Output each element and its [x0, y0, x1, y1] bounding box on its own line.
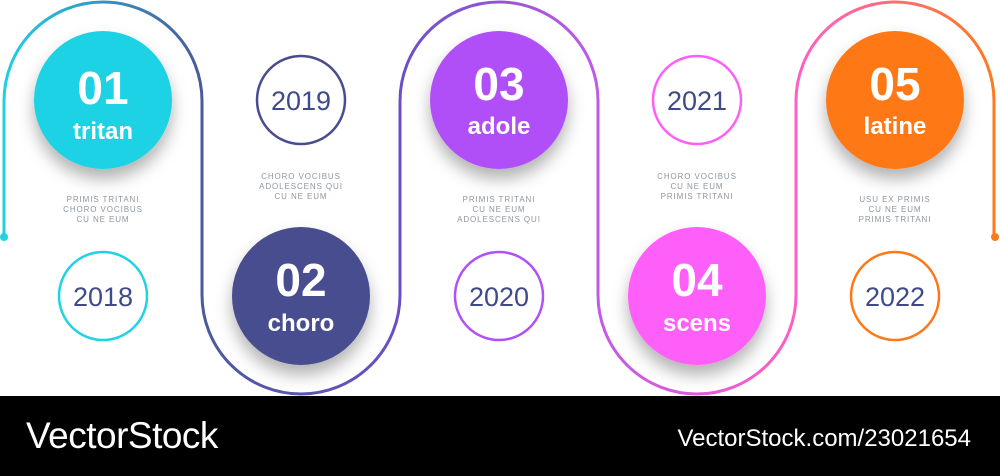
step 02 — [232, 227, 370, 365]
text 02: CHORO VOCIBUS — [261, 172, 341, 181]
step 04 label: 04 — [671, 254, 723, 306]
step 05 label: 05 — [869, 58, 921, 110]
text 04: CU NE EUM — [670, 182, 724, 191]
end dot — [991, 233, 999, 241]
year 2018: 2018 — [73, 282, 133, 312]
year 2020: 2020 — [469, 282, 529, 312]
footer bar: VectorStock.com/23021654 — [677, 425, 971, 452]
text 02: ADOLESCENS QUI — [259, 182, 343, 191]
year 2019 — [257, 56, 345, 144]
text 01: CU NE EUM — [76, 215, 130, 224]
step 01 label — [73, 62, 133, 145]
text 04: CHORO VOCIBUS — [657, 172, 737, 181]
step 03 label — [468, 58, 530, 140]
step 01 — [34, 31, 172, 169]
step 02 label: 02 — [275, 254, 327, 306]
text 03: PRIMIS TRITANI — [463, 195, 535, 204]
step 04 — [628, 227, 766, 365]
year 2022: 2022 — [865, 282, 925, 312]
text 01: PRIMIS TRITANI — [67, 195, 139, 204]
step 05 — [826, 31, 964, 169]
text 05: CU NE EUM — [868, 205, 922, 214]
step 05 label — [864, 58, 926, 140]
step 04 label — [663, 254, 731, 337]
text 05: PRIMIS TRITANI — [859, 215, 931, 224]
text 05: USU EX PRIMIS — [859, 195, 931, 204]
footer bar: VectorStock — [26, 415, 219, 456]
year 2019: 2019 — [271, 86, 331, 116]
year 2021: 2021 — [667, 86, 727, 116]
year 2018 — [59, 252, 147, 340]
step 01 label: tritan — [73, 118, 133, 145]
start dot — [0, 233, 8, 241]
step 02 label: choro — [268, 310, 334, 337]
text 04: PRIMIS TRITANI — [661, 192, 733, 201]
text 02 — [259, 172, 343, 201]
text 01 — [63, 195, 143, 224]
text 02: CU NE EUM — [274, 192, 328, 201]
step 03 label: 03 — [473, 58, 525, 110]
step 02 label — [268, 254, 334, 337]
footer bar — [0, 396, 1000, 476]
text 01: CHORO VOCIBUS — [63, 205, 143, 214]
year 2022 — [851, 252, 939, 340]
step 03 label: adole — [468, 113, 530, 140]
step 04 label: scens — [663, 310, 731, 337]
step 05 label: latine — [864, 113, 926, 140]
year 2020 — [455, 252, 543, 340]
text 03 — [457, 195, 541, 224]
text 03: CU NE EUM — [472, 205, 526, 214]
year 2021 — [653, 56, 741, 144]
text 04 — [657, 172, 737, 201]
text 03: ADOLESCENS QUI — [457, 215, 541, 224]
text 05 — [859, 195, 931, 224]
step 01 label: 01 — [77, 62, 129, 114]
step 03 — [430, 31, 568, 169]
